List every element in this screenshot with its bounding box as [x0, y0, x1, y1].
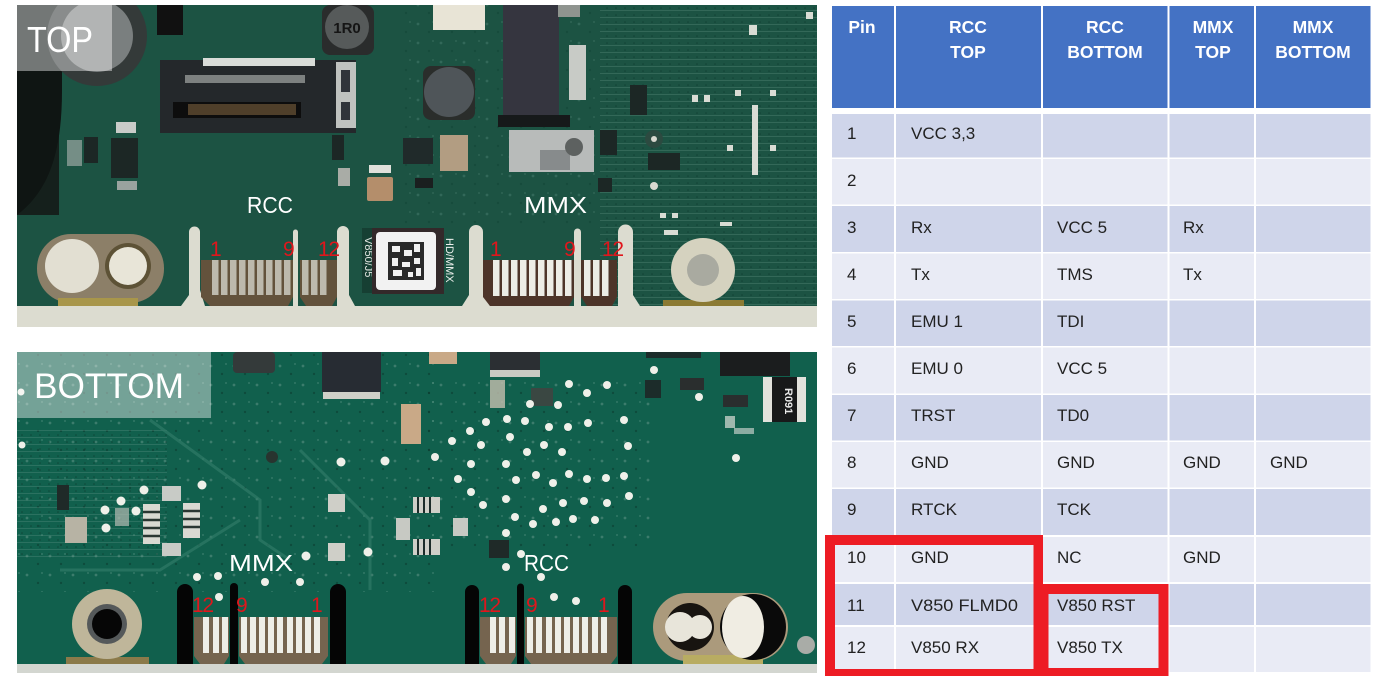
- SD connector and bracket: [498, 5, 594, 172]
- top chips: [233, 352, 790, 444]
- RCC connector bottom: [465, 584, 632, 664]
- row 9: 9: [847, 500, 856, 519]
- MMX top pin numbers: [490, 238, 624, 261]
- RCC top pin numbers: 12: [318, 238, 340, 261]
- label V850/J5: V850/J5: [362, 237, 374, 277]
- table header: TOP: [950, 42, 986, 62]
- row 11: [832, 584, 1370, 625]
- label: RCC top: RCC: [247, 192, 293, 218]
- row 8: GND: [1270, 453, 1308, 472]
- row 8: GND: [1183, 453, 1221, 472]
- row 5: TDI: [1057, 312, 1084, 331]
- RCC top pin numbers: [210, 238, 340, 261]
- mounting hole left: [66, 589, 149, 664]
- table header: BOTTOM: [1275, 42, 1351, 62]
- row 1: [832, 114, 1370, 158]
- row 12: V850 RX: [911, 638, 979, 657]
- row 6: [832, 348, 1370, 394]
- mounting slot right: [653, 593, 815, 664]
- table header: Pin: [848, 17, 876, 37]
- row 8: GND: [1057, 453, 1095, 472]
- row 3: Rx: [1183, 218, 1204, 237]
- label: MMX top: MMX: [524, 192, 587, 218]
- callout: red box around RCC TOP pins 10-12: [825, 535, 1043, 676]
- row 6: EMU 0: [911, 359, 963, 378]
- row 4: TMS: [1057, 265, 1093, 284]
- MMX bottom pin numbers: [192, 594, 323, 617]
- MMX bottom pin numbers: 9: [236, 594, 248, 617]
- MMX bottom pin numbers: 12: [192, 594, 214, 617]
- label: RCC bottom: RCC: [524, 550, 569, 576]
- row 12: 12: [847, 638, 866, 657]
- MMX top pin numbers: 9: [564, 238, 576, 261]
- resistor R091: [763, 377, 806, 422]
- resistor R091: R091: [782, 388, 794, 414]
- bottom edge: [17, 664, 817, 673]
- row 3: [832, 206, 1370, 252]
- table header: BOTTOM: [1067, 42, 1143, 62]
- row 3: Rx: [911, 218, 932, 237]
- row 5: EMU 1: [911, 312, 963, 331]
- row 12: [832, 627, 1370, 672]
- table header: TOP: [1195, 42, 1231, 62]
- overlay: BOTTOM tag: BOTTOM: [34, 367, 184, 406]
- row 10: GND: [911, 548, 949, 567]
- row 12: V850 TX: [1057, 638, 1123, 657]
- mid parts: [57, 451, 509, 561]
- row 4: 4: [847, 265, 856, 284]
- label: MMX bottom: MMX: [229, 550, 293, 576]
- MMX connector bottom: [177, 583, 346, 664]
- RCC bottom pin numbers: 9: [526, 594, 538, 617]
- row 3: VCC 5: [1057, 218, 1107, 237]
- white module top: [433, 5, 485, 30]
- table header: MMX: [1293, 17, 1334, 37]
- small white vias: [18, 366, 740, 605]
- row 10: [832, 537, 1370, 582]
- inductor 1R0: 1R0: [333, 20, 361, 37]
- MMX bottom pin numbers: 1: [311, 594, 323, 617]
- row 8: 8: [847, 453, 856, 472]
- RCC bottom pin numbers: 12: [479, 594, 501, 617]
- mounting slot left: [37, 234, 164, 306]
- table header: [832, 6, 1370, 108]
- row 1: 1: [847, 124, 856, 143]
- table header: RCC: [949, 17, 987, 37]
- row 4: Tx: [1183, 265, 1202, 284]
- MMX top pin numbers: 12: [602, 238, 624, 261]
- row 7: TRST: [911, 406, 955, 425]
- table header: RCC: [1086, 17, 1124, 37]
- inductor top left: [47, 0, 183, 86]
- RCC top pin numbers: 1: [210, 238, 222, 261]
- row 8: [832, 442, 1370, 488]
- inductor 1R0: [322, 5, 374, 55]
- data matrix sticker: [372, 228, 444, 294]
- row 9: [832, 489, 1370, 535]
- label HD/MMX: HD/MMX: [443, 238, 455, 283]
- RCC connector top: [181, 226, 355, 306]
- row 5: [832, 300, 1370, 346]
- white parts far right: [660, 12, 813, 235]
- row 6: VCC 5: [1057, 359, 1107, 378]
- row 3: 3: [847, 218, 856, 237]
- flex connector: [160, 58, 356, 133]
- MMX top pin numbers: 1: [490, 238, 502, 261]
- row 11: 11: [847, 596, 865, 615]
- row 5: 5: [847, 312, 856, 331]
- row 2: 2: [847, 171, 856, 190]
- bottom cream edge: [17, 306, 817, 327]
- row 10: NC: [1057, 548, 1082, 567]
- panel: bottom side board photo: [17, 352, 817, 673]
- callout: red box around RCC BOTTOM pins 11-12: [1043, 584, 1168, 676]
- table header: MMX: [1193, 17, 1234, 37]
- row 2: [832, 159, 1370, 204]
- row 7: TD0: [1057, 406, 1089, 425]
- label V850/J5: [362, 228, 372, 293]
- row 10: 10: [847, 548, 866, 567]
- overlay: TOP tag: TOP: [27, 19, 93, 60]
- mounting hole right: [663, 238, 744, 306]
- row 6: 6: [847, 359, 856, 378]
- row 9: TCK: [1057, 500, 1092, 519]
- small parts centre: [332, 85, 680, 201]
- overlay: BOTTOM tag: [17, 352, 211, 418]
- RCC top pin numbers: 9: [283, 238, 295, 261]
- row 11: V850 RST: [1057, 596, 1135, 615]
- inductor right: [423, 66, 475, 120]
- row 8: GND: [911, 453, 949, 472]
- row 7: [832, 395, 1370, 440]
- small chips left: [67, 122, 138, 190]
- row 4: Tx: [911, 265, 930, 284]
- MMX connector top: [462, 224, 640, 306]
- row 10: GND: [1183, 548, 1221, 567]
- RCC bottom pin numbers: 1: [598, 594, 610, 617]
- RCC bottom pin numbers: [479, 594, 610, 617]
- panel: top side board photo: [17, 0, 817, 327]
- row 11: V850 FLMD0: [911, 596, 1018, 615]
- row 9: RTCK: [911, 500, 958, 519]
- overlay: TOP tag: [17, 5, 112, 71]
- row 7: 7: [847, 406, 856, 425]
- row 4: [832, 254, 1370, 299]
- row 1: VCC 3,3: [911, 124, 975, 143]
- pinout table: [832, 6, 1370, 672]
